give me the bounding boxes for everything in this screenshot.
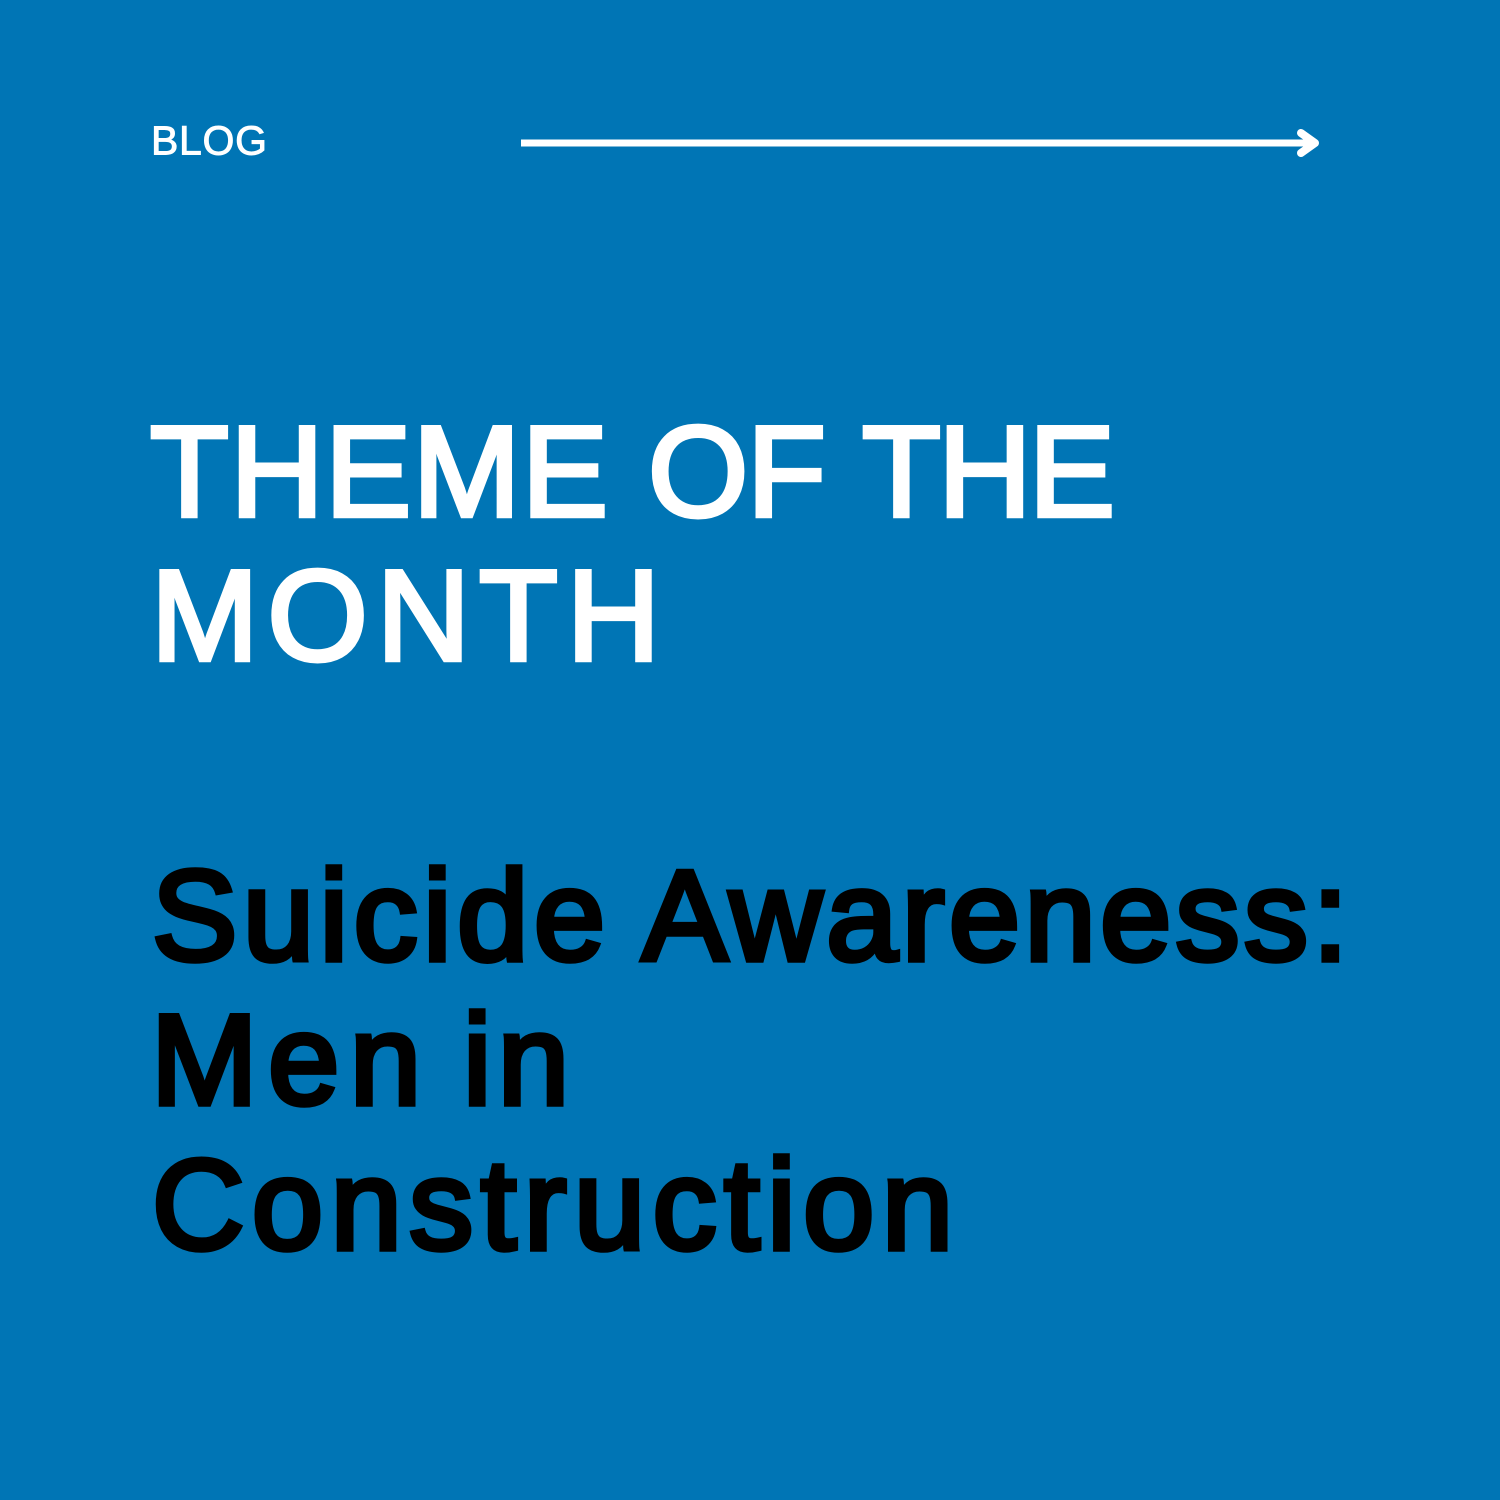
- label: BLOG: BLOG: [151, 118, 267, 164]
- title: suicide awareness: Awareness:: [642, 845, 1348, 988]
- title: suicide awareness: in: [463, 989, 569, 1132]
- title: suicide awareness: Men: [151, 989, 421, 1132]
- heading: theme of the month: THE: [862, 400, 1115, 544]
- title: suicide awareness: Suicide: [152, 845, 605, 988]
- title: suicide awareness: [151, 845, 1348, 1277]
- heading: theme of the month: [150, 400, 1115, 688]
- heading: theme of the month: MONTH: [151, 544, 660, 688]
- arrow: [521, 133, 1315, 153]
- heading: theme of the month: THEME: [150, 400, 608, 544]
- heading: theme of the month: OF: [648, 400, 826, 544]
- title: suicide awareness: Construction: [152, 1134, 953, 1277]
